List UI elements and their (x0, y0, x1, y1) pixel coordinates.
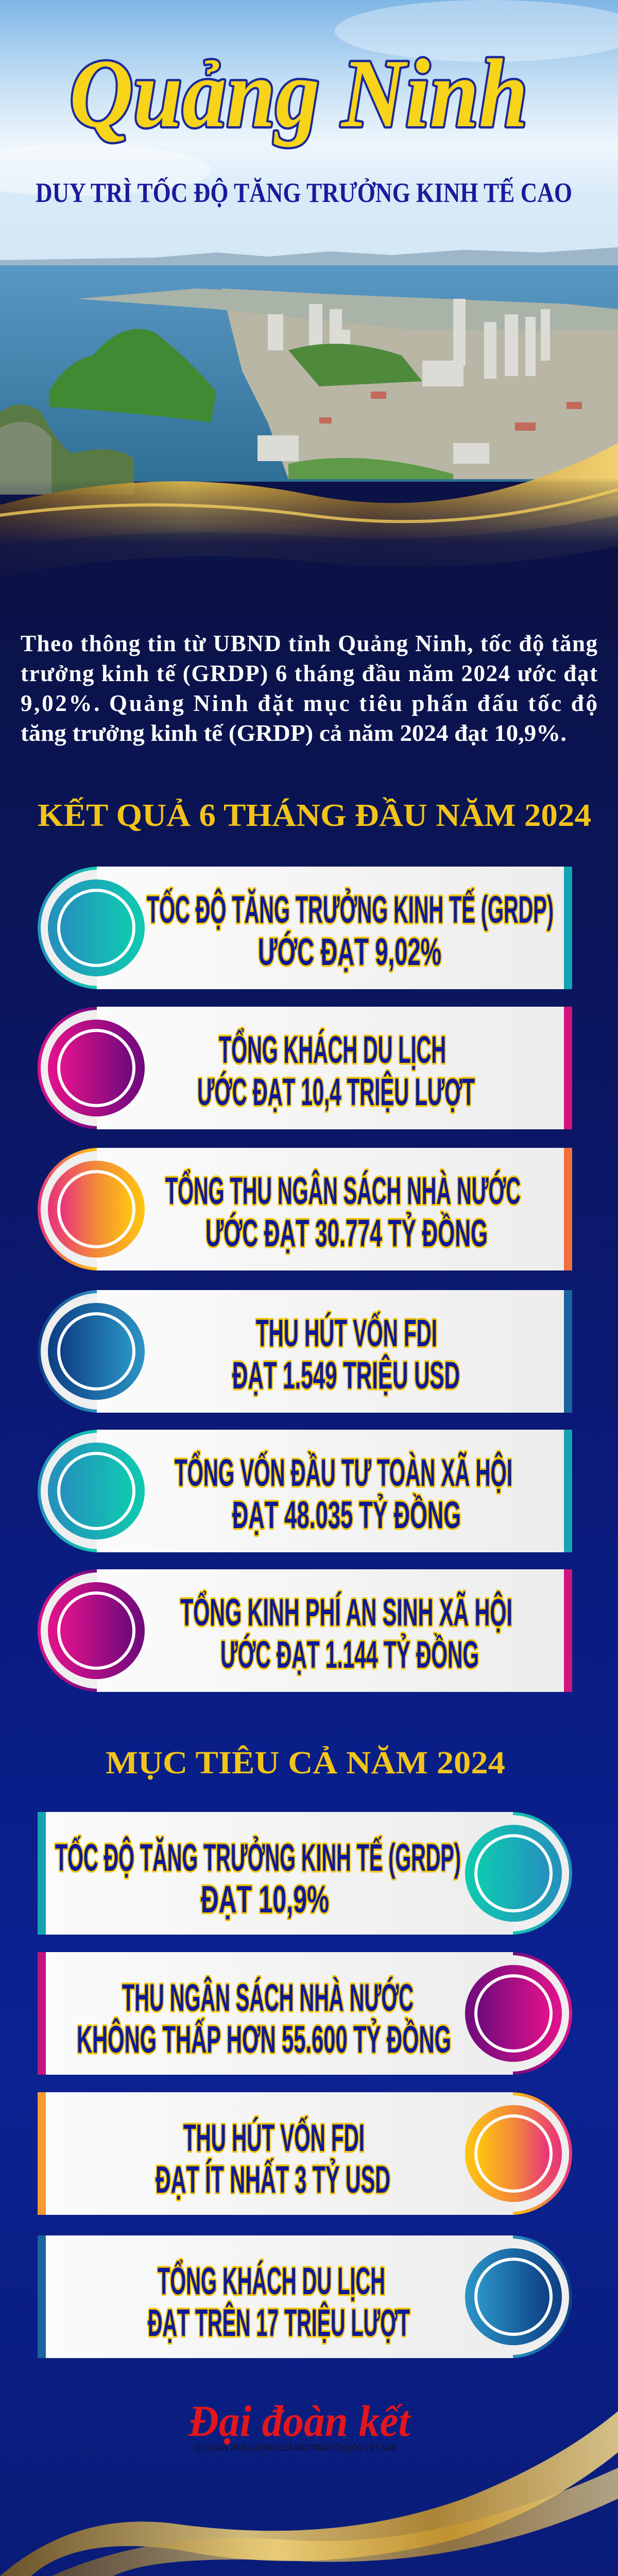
text (77, 1976, 451, 2061)
card R5: total investment (38, 1430, 572, 1552)
text (156, 2116, 390, 2201)
text: ĐẠT ÍT NHẤT 3 TỶ USD (156, 2158, 390, 2201)
text (165, 1170, 521, 1255)
card R2: tourists (38, 1007, 572, 1129)
footer logo: Dai Doan Ket: Đại đoàn kết (188, 2396, 411, 2446)
icon circle (465, 2105, 562, 2202)
text: THU HÚT VỐN FDI (256, 1312, 437, 1354)
icon circle (48, 1161, 145, 1258)
text: THU HÚT VỐN FDI (183, 2116, 365, 2159)
intro paragraph: trưởng kinh tế (GRDP) 6 tháng đầu năm 2024 ước đạt (21, 660, 597, 686)
text (175, 1451, 512, 1536)
card R1: GRDP growth (38, 867, 572, 989)
header: photo banner with title (0, 0, 618, 567)
icon circle (465, 1825, 562, 1922)
footer gold waves (0, 2411, 618, 2576)
card T3: FDI target (38, 2092, 572, 2215)
title: Quảng Ninh (70, 40, 528, 148)
text: ĐẠT 10,9% (201, 1878, 329, 1921)
heading: targets: MỤC TIÊU CẢ NĂM 2024 (106, 1745, 505, 1781)
text (232, 1312, 460, 1397)
text (147, 888, 554, 973)
intro paragraph: 9,02%. Quảng Ninh đặt mục tiêu phấn đấu tốc độ (21, 690, 597, 716)
intro paragraph: Theo thông tin từ UBND tỉnh Quảng Ninh, tốc độ tăng (21, 631, 597, 656)
heading: results: KẾT QUẢ 6 THÁNG ĐẦU NĂM 2024 (38, 798, 591, 833)
icon circle (48, 1582, 145, 1679)
icon circle (48, 1303, 145, 1400)
icon circle (48, 1443, 145, 1539)
card R4: FDI (38, 1290, 572, 1413)
card R3: budget revenue (38, 1148, 572, 1270)
text (55, 1836, 461, 1921)
intro paragraph (21, 631, 597, 746)
card T1: GRDP target (38, 1812, 572, 1935)
icon circle (465, 2248, 562, 2345)
icon circle (48, 879, 145, 976)
text: TỔNG KHÁCH DU LỊCH (158, 2260, 385, 2302)
card T2: budget target (38, 1952, 572, 2075)
text (180, 1591, 512, 1676)
text (148, 2260, 410, 2344)
text (197, 1028, 475, 1113)
intro paragraph: tăng trưởng kinh tế (GRDP) cả năm 2024 đạt 10,9%. (21, 720, 566, 746)
card R6: social security (38, 1569, 572, 1692)
icon circle (465, 1965, 562, 2062)
card T4: tourist target (38, 2235, 572, 2358)
text: ƯỚC ĐẠT 9,02% (258, 930, 441, 973)
icon circle (48, 1020, 145, 1116)
text: ĐẠT 48.035 TỶ ĐỒNG (232, 1494, 461, 1536)
